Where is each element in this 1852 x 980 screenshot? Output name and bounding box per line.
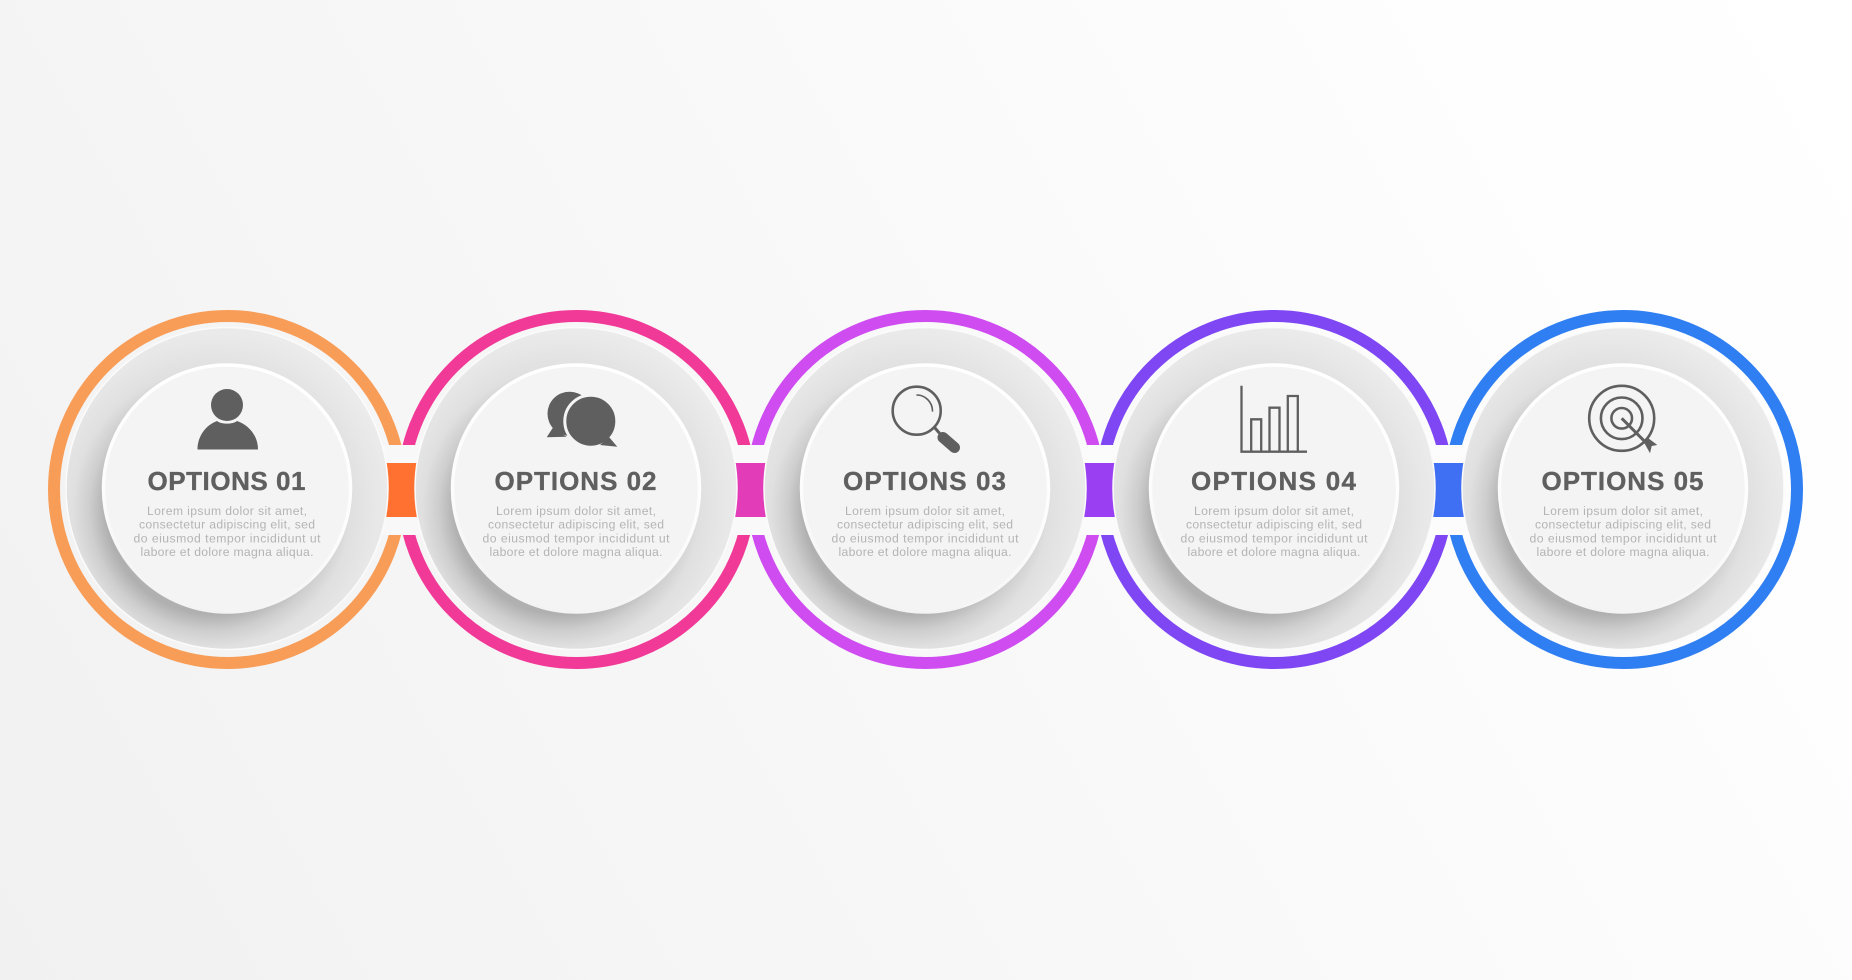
body text 1 [134,504,321,559]
ring 2 pink [403,316,750,663]
body text 2: Lorem ipsum dolor sit amet, [496,504,656,518]
connector gap 4-5 [1387,445,1512,535]
ring 5 blue [1450,316,1797,663]
body text 1: consectetur adipiscing elit, sed [139,518,315,532]
top plate 1 [104,365,350,612]
body text 1: Lorem ipsum dolor sit amet, [147,504,307,518]
heading 2: OPTIONS 02 [494,466,656,496]
body text 1: do eiusmod tempor incididunt ut [134,531,321,545]
heading 4: OPTIONS 04 [1191,466,1357,496]
heading 1: OPTIONS 01 [148,466,306,496]
option 04 [1113,328,1435,650]
body text 5 [1530,504,1717,559]
heading 5: OPTIONS 05 [1542,466,1704,496]
disc 4 [1113,328,1435,650]
connector gap 3-4 [1038,445,1163,535]
body text 3: Lorem ipsum dolor sit amet, [845,504,1005,518]
connector magenta [729,463,773,517]
body text 2: labore et dolore magna aliqua. [490,545,662,559]
body text 3: do eiusmod tempor incididunt ut [832,531,1019,545]
connector gap 2-3 [689,445,814,535]
icon: chat bubbles [547,392,617,447]
body text 3: labore et dolore magna aliqua. [838,545,1012,559]
top plate 3 [802,365,1048,612]
option 02 [415,328,737,650]
body text 1: labore et dolore magna aliqua. [140,545,314,559]
body text 2: do eiusmod tempor incididunt ut [482,531,670,545]
connector blue [1427,463,1471,517]
connector purple [1078,463,1122,517]
body text 5: Lorem ipsum dolor sit amet, [1543,504,1703,518]
ring 1 orange [54,316,401,663]
disc 2 [415,328,737,650]
body text 5: consectetur adipiscing elit, sed [1535,518,1711,532]
connector gap 1-2 [340,445,465,535]
icon: person [198,389,258,450]
top plate 4 [1150,365,1398,612]
disc 1 [66,328,388,650]
icon: target with arrow [1589,386,1657,453]
ring 4 purple [1101,316,1448,663]
body text 4 [1180,504,1368,559]
disc 5 [1462,328,1784,650]
body text 4: labore et dolore magna aliqua. [1188,545,1360,559]
ring 3 violet [752,316,1099,663]
body text 5: labore et dolore magna aliqua. [1536,545,1710,559]
option 03 [764,328,1086,650]
body text 2 [482,504,670,559]
body text 3: consectetur adipiscing elit, sed [837,518,1013,532]
body text 3 [832,504,1019,559]
top plate 5 [1500,365,1746,612]
top plate 2 [452,365,700,612]
disc 3 [764,328,1086,650]
body text 2: consectetur adipiscing elit, sed [488,518,664,532]
icon: magnifier [893,387,954,448]
connector orange [380,463,424,517]
body text 4: consectetur adipiscing elit, sed [1186,518,1362,532]
heading 3: OPTIONS 03 [843,466,1006,496]
option 01 [66,328,388,650]
body text 4: Lorem ipsum dolor sit amet, [1194,504,1354,518]
icon: bar chart [1242,386,1307,452]
body text 4: do eiusmod tempor incididunt ut [1180,531,1368,545]
body text 5: do eiusmod tempor incididunt ut [1530,531,1717,545]
option 05 [1462,328,1784,650]
